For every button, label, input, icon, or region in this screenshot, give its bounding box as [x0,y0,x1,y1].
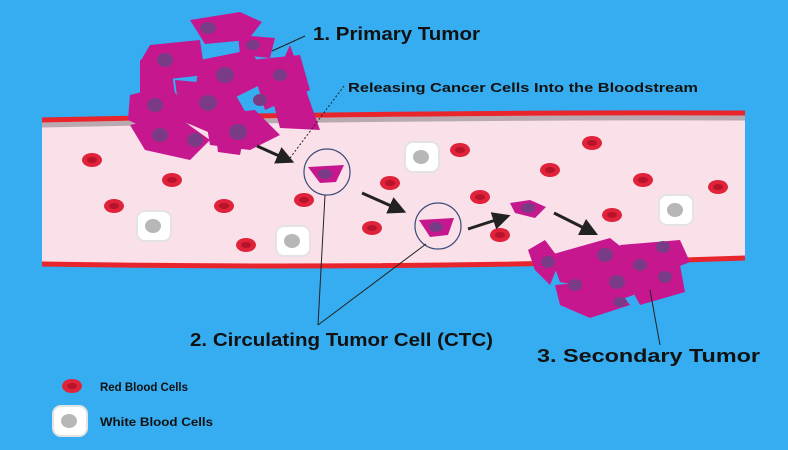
label: CTC: 2. Circulating Tumor Cell (CTC) [190,330,493,350]
legend [53,379,213,436]
CTC cells with circles [304,149,546,249]
red blood cells in vessel [82,136,728,252]
legend: White Blood Cells [100,417,213,429]
legend: Red Blood Cells [100,382,188,394]
arrows [257,146,590,231]
secondary tumor [528,238,690,318]
blood vessel [42,113,745,266]
primary tumor [128,12,320,160]
label: releasing: Releasing Cancer Cells Into the Bloodstream [348,80,698,95]
white blood cells in vessel [137,142,693,256]
label: primary tumor: 1. Primary Tumor [313,24,480,44]
leader lines [272,36,660,345]
label: secondary tumor: 3. Secondary Tumor [537,346,760,366]
